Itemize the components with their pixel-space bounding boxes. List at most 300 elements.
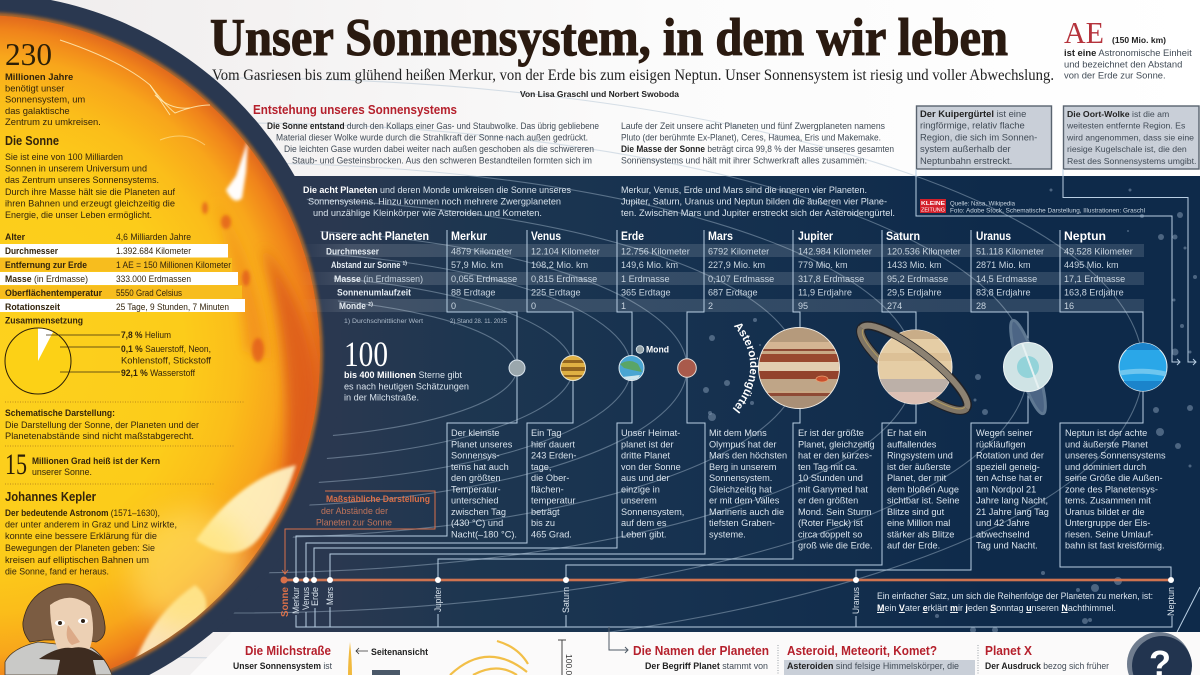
text: Neptun: Untergruppe der Eis- <box>1065 518 1150 528</box>
timeline: distances to scale: Mars <box>324 587 335 605</box>
table: Saturn: 95,2 Erdmasse <box>887 274 948 284</box>
table: Saturn: 120.536 Kilometer <box>887 246 961 256</box>
arrow: Kuiper connector <box>916 169 1180 365</box>
text: Neptun: riesen. Seine Umlauf- <box>1065 529 1153 539</box>
sun description: Sonnen in unserem Universum und <box>5 162 147 174</box>
text: Merkur: Nacht(–180 °C). <box>451 529 517 539</box>
text: Saturn: auffallendes <box>887 439 937 449</box>
panel: dark space background <box>0 176 1200 632</box>
text: Jupiter: Er ist der größte <box>798 428 864 438</box>
callout: scale representation <box>282 491 435 574</box>
byline: Von Lisa Graschl und Norbert Swoboda <box>520 89 679 99</box>
table: Merkur: Merkur <box>451 231 487 243</box>
planet: Merkur <box>509 360 525 376</box>
label: Asteroidengürtel: Asteroidengürtel <box>732 324 758 414</box>
title: Unser Sonnensystem, in dem wir leben <box>210 9 1008 67</box>
Kepler text: Bewegungen der Planeten geben: Sie <box>5 542 155 553</box>
planet: Uranus <box>1004 318 1052 416</box>
table: Mars: 0,107 Erdmasse <box>708 274 774 284</box>
text: Erde: aus und der <box>621 473 670 483</box>
callout: Kuipergürtel: system außerhalb der <box>920 143 1011 154</box>
text: Mars: Berg in unserem <box>709 462 777 472</box>
text: Jupiter: Mond. Sein Sturm <box>798 507 872 517</box>
table: Mars: 6792 Kilometer <box>708 246 769 256</box>
stat 230 text: benötigt unser <box>5 82 64 93</box>
sun: yellow highlight <box>130 510 250 630</box>
text: Uranus: Rotation und der <box>976 450 1044 460</box>
text: Mars: er mit dem Valles <box>709 496 780 506</box>
table: Saturn: 274 <box>887 301 902 311</box>
schematic note <box>5 407 199 441</box>
source credit: Quelle: Nasa, Wikipedia <box>950 200 1015 208</box>
text: Venus: temperatur <box>531 496 575 506</box>
text: Merkur: Temperatur- <box>451 484 501 494</box>
panel: Entstehung text: Pluto (der berühmte Ex-Planet), Ceres, Haumea, Eris und Makemake. <box>621 132 881 142</box>
table: Uranus: 14,5 Erdmasse <box>976 274 1037 284</box>
callout: Kuipergürtel: ringförmige, relativ flache <box>920 120 1025 131</box>
table: Saturn: Saturn <box>886 231 920 243</box>
sun: pale flare lower <box>196 465 296 553</box>
table: Erde: 149,6 Mio. km <box>621 260 678 270</box>
text: Venus: 465 Grad. <box>531 529 572 539</box>
table: Venus: 0,815 Erdmasse <box>531 274 597 284</box>
text: Neptun: zone des Planetensys- <box>1065 484 1158 494</box>
planet: Mond <box>636 344 669 354</box>
panel: Die Milchstraße <box>233 643 332 671</box>
stat 100: bis 400 Millionen Sterne gibt <box>344 369 462 380</box>
table: Uranus: 51.118 Kilometer <box>976 246 1044 256</box>
text: Jupiter: 10 Stunden und <box>798 473 863 483</box>
text: Erde: planet ist der <box>621 439 674 449</box>
text: Jupiter: (Roter Fleck) ist <box>798 518 863 528</box>
callout: scale representation: der Abstände der <box>321 505 388 516</box>
table: Neptun: 49.528 Kilometer <box>1064 246 1133 256</box>
table: Merkur: 4879 Kilometer <box>451 246 512 256</box>
sun description: das Zentrum unseres Sonnensystems. <box>5 174 159 185</box>
text: Venus: die Ober- <box>531 473 569 483</box>
heading: Entstehung unseres Sonnensystems <box>253 102 457 117</box>
table: Neptun: 4495 Mio. km <box>1064 260 1119 270</box>
text: Erde: Leben gibt. <box>621 529 666 539</box>
table: Mars <box>708 231 774 311</box>
sun data table: Alter <box>5 231 25 242</box>
sun data table: 25 Tage, 9 Stunden, 7 Minuten <box>116 301 229 312</box>
panel: Entstehung text: Material dieser Wolke wurde durch die Strahlkraft der Sonne nach außen gedrückt. <box>276 132 588 142</box>
panel: Entstehung text: Die Sonne entstand durch den Kollaps einer Gas- und Staubwolke. Das übrig gebliebene <box>267 120 599 131</box>
intro text right: Merkur, Venus, Erde und Mars sind die inneren vier Planeten. <box>621 184 867 195</box>
sun data table: Oberflächentemperatur <box>5 287 102 298</box>
AE value: (150 Mio. km) <box>1112 35 1166 45</box>
panel: Planet X <box>985 643 1109 671</box>
table: row labels: Masse (in Erdmassen) <box>334 274 423 285</box>
stat 100 <box>344 334 469 402</box>
table: Saturn: 1433 Mio. km <box>887 260 942 270</box>
planet: Neptun <box>1118 343 1168 391</box>
stat 15: Millionen Grad heiß ist der Kern <box>32 455 160 466</box>
schematic note: Die Darstellung der Sonne, der Planeten und der <box>5 419 199 430</box>
table: Erde: 1 <box>621 301 626 311</box>
text: Erde: einzige in <box>621 484 660 494</box>
intro text left: Die acht Planeten und deren Monde umkreisen die Sonne unseres <box>303 184 571 195</box>
AE text: und bezeichnet den Abstand <box>1064 58 1182 69</box>
text: Neptun: und dominiert durch <box>1065 462 1146 472</box>
text: Uranus: Jahre lang Nacht, <box>976 496 1048 506</box>
table: Merkur: 0,055 Erdmasse <box>451 274 517 284</box>
panel: Entstehung text: Staub- und Gesteinsbrocken. Aus den schweren Bestandteilen formten sich im <box>292 154 592 166</box>
text: Neptun: und äußerste Planet <box>1065 439 1148 449</box>
text: Mars: Sonnensystem. <box>709 473 772 483</box>
text: Uranus: abwechselnd <box>976 529 1030 539</box>
intro text right: ten. Zwischen Mars und Jupiter erstreckt sich der Asteroidengürtel. <box>621 207 895 218</box>
sun: pale flare bottom <box>134 584 208 658</box>
timeline: distances to scale: Saturn <box>560 587 571 613</box>
sun description: Durch ihre Masse hält sie die Planeten auf <box>5 186 175 197</box>
sun: top filaments <box>60 40 210 145</box>
table: Venus <box>531 231 600 311</box>
AE text: von der Erde zur Sonne. <box>1064 70 1166 81</box>
sun description: Energie, die unser Leben ermöglicht. <box>5 209 152 220</box>
text: Neptun: unseres Sonnensystems <box>1065 450 1166 460</box>
table: row labels <box>321 231 429 312</box>
Kepler text: die Sonne, fand er heraus. <box>5 566 109 576</box>
sun <box>0 15 320 675</box>
table: Merkur: 57,9 Mio. km <box>451 260 503 270</box>
table: Uranus: 2871 Mio. km <box>976 260 1031 270</box>
text: Venus: Ein Tag <box>531 428 561 438</box>
table: Erde: 12.756 Kilometer <box>621 246 690 256</box>
text: Neptun: Uranus bildet er die <box>1065 507 1145 517</box>
table: Jupiter: 142.984 Kilometer <box>798 246 872 256</box>
table: Uranus: Uranus <box>976 231 1011 243</box>
stat 100: 100 <box>344 334 388 374</box>
text: Mars: Gleichzeitig hat <box>709 484 772 494</box>
intro text left: Sonnensystems. Hinzu kommen noch mehrere Zwergplaneten <box>308 196 561 206</box>
text: Merkur: Sonnensys- <box>451 450 500 460</box>
sun data table: Masse (in Erdmasse) <box>5 273 88 284</box>
callout: Kuipergürtel: Neptunbahn erstreckt. <box>920 155 1012 166</box>
table: Uranus: 28 <box>976 301 986 311</box>
callout: scale representation: Maßstäbliche Darstellung <box>326 493 430 504</box>
text: Neptun: tems. Zusammen mit <box>1065 496 1151 506</box>
text: Jupiter: er den größten <box>798 496 858 506</box>
callout: Oort-Wolke <box>1064 106 1199 169</box>
text: Saturn: stärker als Blitze <box>887 529 954 539</box>
panel: Die Milchstraße: Unser Sonnensystem ist <box>233 660 332 671</box>
Kepler text <box>5 489 177 576</box>
text: Saturn: dem bloßen Auge <box>887 484 959 494</box>
sun data table: Rotationszeit <box>5 301 60 312</box>
sun data table: Zusammensetzung <box>5 314 83 326</box>
heading: Die Milchstraße <box>245 643 331 658</box>
planet: Mond: Mond <box>646 344 669 354</box>
callout: Oort-Wolke: wird angenommen, dass sie eine <box>1066 132 1194 142</box>
panel: Entstehung text: Sonnensystems und hält mit ihrer Schwerkraft alles zusammen. <box>621 154 867 166</box>
text: Merkur: tems hat auch <box>451 462 509 472</box>
table: Neptun: 163,8 Erdjahre <box>1064 288 1124 298</box>
callout: Oort-Wolke: Rest des Sonnensystems umgibt. <box>1067 156 1196 166</box>
callout: Oort-Wolke: riesige Kugelschale ist, die den <box>1067 144 1187 154</box>
text: Uranus: Wegen seiner <box>976 428 1033 438</box>
table: row labels: Unsere acht Planeten <box>321 231 429 243</box>
panel: Die Namen der Planeten <box>633 643 769 671</box>
text: Uranus: ten Achse hat er <box>976 473 1042 483</box>
sun description: Sie ist eine von 100 Milliarden <box>5 151 123 162</box>
text: Mars: Olympus hat der <box>709 439 776 449</box>
text: Erde: unserem <box>621 496 657 506</box>
text: Erde: dritte Planet <box>621 450 670 460</box>
table footnotes <box>344 318 507 325</box>
stars <box>703 188 1197 633</box>
table: Erde: 365 Erdtage <box>621 288 671 298</box>
text: Merkur: den größten <box>451 473 501 483</box>
table: row labels: Durchmesser <box>326 246 379 258</box>
Kepler text: konnte eine bessere Erklärung für die <box>5 530 157 541</box>
text: Erde: Unser Heimat- <box>621 428 680 438</box>
text: Saturn: Er hat ein <box>887 428 926 438</box>
table: Mars: 687 Erdtage <box>708 288 758 298</box>
heading: Die Sonne: Die Sonne <box>5 133 59 148</box>
table footnotes: 2) Stand 28. 11. 2025 <box>450 318 507 325</box>
table: row labels: Abstand zur Sonne ¹⁾ <box>331 260 408 271</box>
chart: Milky Way side view <box>348 640 574 675</box>
text: Uranus: Tag und Nacht. <box>976 540 1038 550</box>
table: Venus: 225 Erdtage <box>531 288 581 298</box>
panel: Die Namen der Planeten: Die Namen der Planeten <box>633 643 769 658</box>
intro text right: Jupiter, Saturn, Uranus und Neptun bilden die äußeren vier Plane- <box>621 196 887 206</box>
connector lines <box>296 230 1172 627</box>
timeline: distances to scale: Neptun <box>1165 587 1176 616</box>
subtitle: Vom Gasriesen bis zum glühend heißen Merkur, von der Erde bis zum eisigen Neptun. Unser Sonnensystem ist riesig und voller Abwechslung. <box>212 67 1054 84</box>
text: Venus: beträgt <box>531 507 560 517</box>
text: Venus: hier dauert <box>531 439 575 449</box>
text: Merkur: zwischen Tag <box>451 507 506 517</box>
text: Jupiter: ten Tag mit ca. <box>798 462 858 472</box>
sun: red specks <box>202 202 264 362</box>
sun data table: 4,6 Milliarden Jahre <box>116 231 191 242</box>
sun: inner orange mottling <box>222 227 270 358</box>
table: Venus: 12.104 Kilometer <box>531 246 600 256</box>
text: Venus: flächen- <box>531 484 564 494</box>
pie chart: composition: Kohlenstoff, Stickstoff <box>121 354 211 366</box>
pie chart: composition: 92,1 % Wasserstoff <box>121 367 195 378</box>
table: Uranus <box>976 231 1044 311</box>
text: Jupiter: groß wie die Erde. <box>798 540 873 550</box>
text: Uranus: rückläufigen <box>976 439 1026 449</box>
Kepler text: der unter anderem in Graz und Linz wirkte, <box>5 518 177 530</box>
table: Erde <box>621 231 690 311</box>
planet: Saturn <box>856 321 972 415</box>
planet: Mars <box>678 359 696 377</box>
text: Mars: systeme. <box>709 529 746 539</box>
sun data table: Entfernung zur Erde <box>5 259 87 270</box>
timeline: distances to scale: Erde <box>309 587 320 606</box>
stat 15 <box>5 448 160 481</box>
table: Jupiter: 95 <box>798 301 808 311</box>
callout: scale representation: Planeten zur Sonne <box>316 516 392 528</box>
source credit <box>920 199 1146 214</box>
timeline: distances to scale: Sonne <box>279 587 291 617</box>
stat 15: 15 <box>5 448 27 481</box>
arrow: Oort connector <box>1063 169 1196 365</box>
timeline: distances to scale <box>279 576 1176 617</box>
source credit: ZEITUNG <box>921 208 945 214</box>
panel: Planet X: Der Ausdruck bezog sich früher <box>985 660 1109 671</box>
stat 230 text: Zentrum zu umkreisen. <box>5 116 101 127</box>
table: row labels: Monde ²⁾ <box>339 301 374 312</box>
panel: Entstehung text <box>253 102 894 166</box>
table: Jupiter: Jupiter <box>798 231 833 243</box>
sun: bright flare upper <box>226 140 248 201</box>
table: Jupiter: 317,8 Erdmasse <box>798 274 864 284</box>
timeline: distances to scale: Merkur <box>290 587 301 614</box>
text: Mars: Marineris auch die <box>709 507 784 517</box>
text: Merkur: (430 °C) und <box>451 518 503 528</box>
table: Mars: Mars <box>708 231 733 243</box>
text: Saturn: sichtbar ist. Seine <box>887 496 960 506</box>
panel: sun facts left column <box>0 36 245 675</box>
table: Saturn <box>886 231 961 311</box>
pie chart: composition: 0,1 % Sauerstoff, Neon, <box>121 343 211 354</box>
stat 230 text: das galaktische <box>5 105 70 116</box>
text: Saturn: auf der Erde. <box>887 540 940 550</box>
text: Mars: tiefsten Graben- <box>709 518 775 528</box>
text: Neptun: seine Größe die Außen- <box>1065 473 1163 483</box>
text: Saturn: Planet, der mit <box>887 473 947 483</box>
table: Merkur: 0 <box>451 301 456 311</box>
Kepler text: Johannes Kepler <box>5 489 96 504</box>
text: Uranus: am Nordpol 21 <box>976 484 1036 494</box>
sun data table <box>0 231 245 326</box>
sun data table: 1 AE = 150 Millionen Kilometer <box>116 259 231 270</box>
text: Venus: tage, <box>531 462 551 472</box>
sun data table: 5550 Grad Celsius <box>116 287 182 298</box>
AE definition <box>1064 15 1192 81</box>
text: Venus: bis zu <box>531 518 555 528</box>
text: Mars: Mit dem Mons <box>709 428 767 438</box>
callout: Kuipergürtel <box>916 106 1052 169</box>
table footnotes: 1) Durchschnittlicher Wert <box>344 318 423 325</box>
text: Saturn: Blitze sind gut <box>887 507 945 517</box>
timeline: distances to scale: Uranus <box>850 587 861 614</box>
stat 230 text: Sonnensystem, um <box>5 94 85 105</box>
table: Venus: Venus <box>531 231 561 243</box>
table: Jupiter <box>798 231 872 311</box>
panel: Die Namen der Planeten: Der Begriff Planet stammt von <box>645 660 768 671</box>
panel: Asteroid, Meteorit, Komet: Asteroid, Meteorit, Komet? <box>787 643 937 658</box>
panel: Asteroid, Meteorit, Komet: Asteroiden sind felsige Himmelskörper, die <box>787 660 959 671</box>
planet: Jupiter <box>755 328 845 408</box>
text: Erde: von der Sonne <box>621 462 681 472</box>
AE heading: AE <box>1064 15 1104 50</box>
table: Erde: Erde <box>621 231 644 243</box>
timeline: distances to scale: Venus <box>300 587 311 610</box>
table: Mars: 2 <box>708 301 713 311</box>
icon: question mark <box>1127 632 1192 675</box>
text: Jupiter: Planet, gleichzeitig <box>798 439 875 449</box>
intro text left <box>303 184 571 218</box>
text: Saturn: Ringsystem und <box>887 450 953 460</box>
text: Uranus: und 42 Jahre <box>976 518 1030 528</box>
text: Neptun: bahn ist fast kreisförmig. <box>1065 540 1165 550</box>
table: Neptun: 17,1 Erdmasse <box>1064 274 1125 284</box>
panel: bottom white area <box>190 632 1200 675</box>
panel: Asteroid, Meteorit, Komet <box>784 643 975 675</box>
panel: Entstehung text: Die Masse der Sonne beträgt circa 99,8 % der Masse unseres gesamten <box>621 143 894 154</box>
sun data table: 333.000 Erdmassen <box>116 273 191 284</box>
planet: Venus <box>560 356 586 380</box>
text: Uranus: 21 Jahre lang Tag <box>976 507 1049 517</box>
text: Saturn: eine Million mal <box>887 518 950 528</box>
pie chart: composition <box>5 328 211 394</box>
stat 230 text: Millionen Jahre <box>5 71 73 82</box>
text: Neptun: Neptun ist der achte <box>1065 428 1147 438</box>
table: Saturn: 29,5 Erdjahre <box>887 288 942 298</box>
pie chart: composition: 7,8 % Helium <box>121 329 171 340</box>
arrow: to names section <box>609 627 628 653</box>
schematic note: Schematische Darstellung: <box>5 407 115 418</box>
panel: Entstehung text: Laufe der Zeit unsere acht Planeten und fünf Zwergplaneten namens <box>621 120 885 131</box>
callout: Oort-Wolke: Die Oort-Wolke ist die am <box>1067 109 1169 119</box>
mnemonic text: Mein Vater erklärt mir jeden Sonntag unseren Nachthimmel. <box>877 602 1116 613</box>
sun: lower orange limb <box>234 538 266 582</box>
Kepler text: kreisen auf elliptischen Bahnen um <box>5 554 149 565</box>
table: row labels: Sonnenumlaufzeit <box>337 288 412 298</box>
text: Saturn: ist der äußerste <box>887 462 951 472</box>
sun description: ihren Bahnen und erzeugt gleichzeitig die <box>5 198 175 208</box>
panel: Entstehung text: Die leichten Gase wurden dabei weiter nach außen geschoben als die schwereren <box>284 143 594 154</box>
timeline: distances to scale: Jupiter <box>432 587 443 612</box>
sun data table: Durchmesser <box>5 245 58 256</box>
table: Venus: 108,2 Mio. km <box>531 260 588 270</box>
sun data table: 1.392.684 Kilometer <box>116 245 191 256</box>
sun: orange limb patches <box>262 245 318 510</box>
text: Merkur: Planet unseres <box>451 439 513 449</box>
text: Mars: Mars den höchsten <box>709 450 787 460</box>
text: Jupiter: hat er den kürzes- <box>798 450 872 460</box>
mnemonic text: Ein einfacher Satz, um sich die Reihenfolge der Planeten zu merken, ist: <box>877 590 1153 601</box>
text: Uranus: speziell geneig- <box>976 462 1040 472</box>
Kepler text: Der bedeutende Astronom (1571–1630), <box>5 507 160 518</box>
text: Venus: 243 Erden- <box>531 450 576 460</box>
callout: Kuipergürtel: Der Kuipergürtel ist eine <box>920 108 1026 119</box>
table: Neptun: Neptun <box>1064 231 1106 243</box>
table: Venus: 0 <box>531 301 536 311</box>
intro text left: und unzählige Kleinkörper wie Asteroiden und Kometen. <box>313 207 542 218</box>
table: Neptun: 16 <box>1064 301 1074 311</box>
table: Merkur: 88 Erdtage <box>451 288 496 298</box>
text: Merkur: unterschied <box>451 496 498 506</box>
table: Uranus: 83,8 Erdjahre <box>976 288 1031 298</box>
orange corona glow <box>0 12 323 675</box>
source credit: Foto: Adobe Stock, Schematische Darstellung, Illustrationen: Graschl <box>950 208 1146 214</box>
callout: Oort-Wolke: weitesten entfernte Region. Es <box>1066 121 1186 131</box>
table: Jupiter: 779 Mio. km <box>798 260 848 270</box>
text: Erde: auf dem es <box>621 518 667 528</box>
intro text right <box>621 184 895 218</box>
text: Jupiter: mit Ganymed hat <box>798 484 868 494</box>
sun halo <box>0 0 342 675</box>
stat 100: es nach heutigen Schätzungen <box>344 380 469 392</box>
table: Erde: 1 Erdmasse <box>621 274 670 284</box>
text: Erde: Sonnensystem, <box>621 507 684 517</box>
planet: Erde <box>619 356 644 382</box>
text: Merkur: Der kleinste <box>451 428 500 438</box>
icon: Johannes Kepler portrait <box>5 584 112 675</box>
stat 15: unserer Sonne. <box>32 466 92 477</box>
table: Jupiter: 11,9 Erdjahre <box>798 288 852 298</box>
sun description <box>5 151 175 220</box>
stat 230: 230 <box>5 36 52 72</box>
